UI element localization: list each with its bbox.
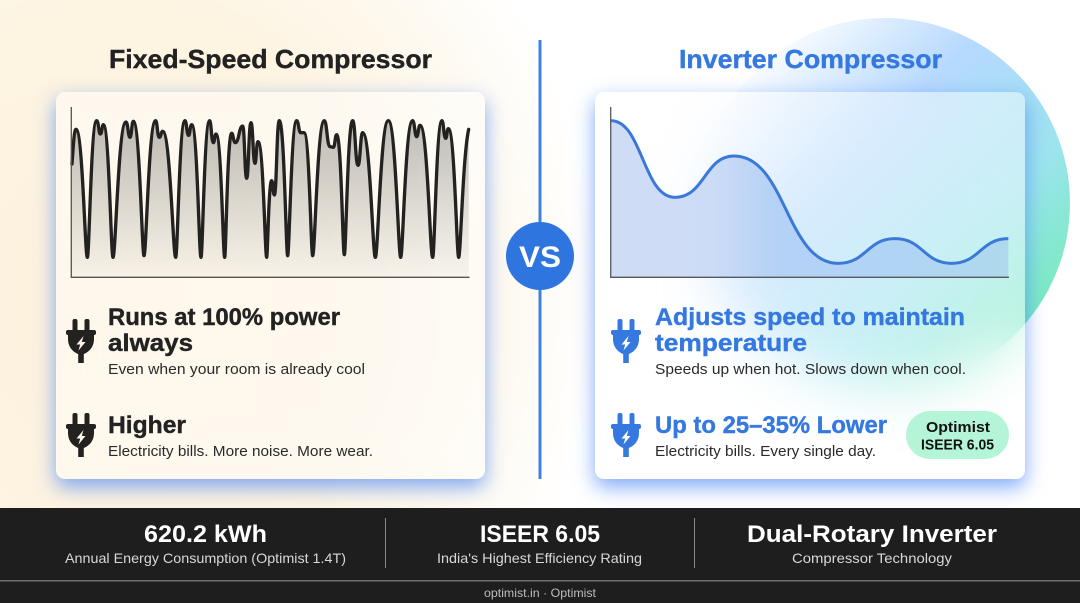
- text: adjusts speed to maintain temperature: Adjusts speed to maintain: [655, 304, 965, 331]
- chart: fixed-speed power line: [71, 107, 470, 277]
- footer credit: optimist.in · Optimist: [484, 586, 597, 600]
- divider: vertical line: [538, 40, 542, 479]
- text: speeds up when hot: Speeds up when hot. Slows down when cool.: [655, 361, 966, 378]
- text: electricity bills more noise more wear: Electricity bills. More noise. More wear.: [108, 443, 373, 460]
- stat: annual energy consumption: 620.2 kWh: [144, 521, 267, 548]
- text: runs at 100% power always: Runs at 100% power: [108, 304, 340, 331]
- stat: annual energy consumption: Annual Energy Consumption (Optimist 1.4T): [65, 550, 346, 566]
- text: even when your room is already cool: Even when your room is already cool: [108, 361, 365, 378]
- stat: compressor technology: Compressor Technology: [792, 550, 952, 566]
- badge: optimist iseer 6.05: [906, 411, 1009, 459]
- panel: fixed-speed compressor: [56, 92, 485, 479]
- text: higher: Higher: [108, 412, 186, 439]
- badge: vs: VS: [519, 241, 561, 274]
- stat: compressor technology: Dual-Rotary Inverter: [747, 521, 997, 548]
- badge: optimist iseer 6.05: ISEER 6.05: [921, 436, 994, 454]
- title: fixed-speed compressor: Fixed-Speed Compressor: [109, 44, 432, 74]
- badge: optimist iseer 6.05: Optimist: [926, 419, 990, 436]
- stat: iseer rating: India's Highest Efficiency Rating: [437, 550, 642, 566]
- text: adjusts speed to maintain temperature: temperature: [655, 330, 807, 357]
- text: adjusts speed to maintain temperature: [655, 304, 965, 357]
- icon: black plug 2: [66, 413, 96, 457]
- text: electricity bills every single day: Electricity bills. Every single day.: [655, 443, 876, 460]
- icon: blue plug 2: [611, 413, 641, 457]
- title: inverter compressor: Inverter Compressor: [679, 44, 942, 74]
- stat: compressor technology: [747, 521, 997, 566]
- chart: inverter power curve: [611, 107, 1009, 277]
- badge: vs: [506, 222, 574, 290]
- panel: inverter compressor: [595, 92, 1025, 479]
- footer: stats bar: [0, 508, 1080, 603]
- text: up to 25-35% lower: Up to 25–35% Lower: [655, 412, 887, 439]
- stat: iseer rating: [437, 521, 642, 566]
- stat: iseer rating: ISEER 6.05: [480, 521, 600, 548]
- background: blue-green circle: [700, 18, 1070, 388]
- text: runs at 100% power always: [108, 304, 340, 357]
- icon: blue plug 1: [611, 319, 641, 363]
- icon: black plug 1: [66, 319, 96, 363]
- text: runs at 100% power always: always: [108, 330, 193, 357]
- stat: annual energy consumption: [65, 521, 346, 566]
